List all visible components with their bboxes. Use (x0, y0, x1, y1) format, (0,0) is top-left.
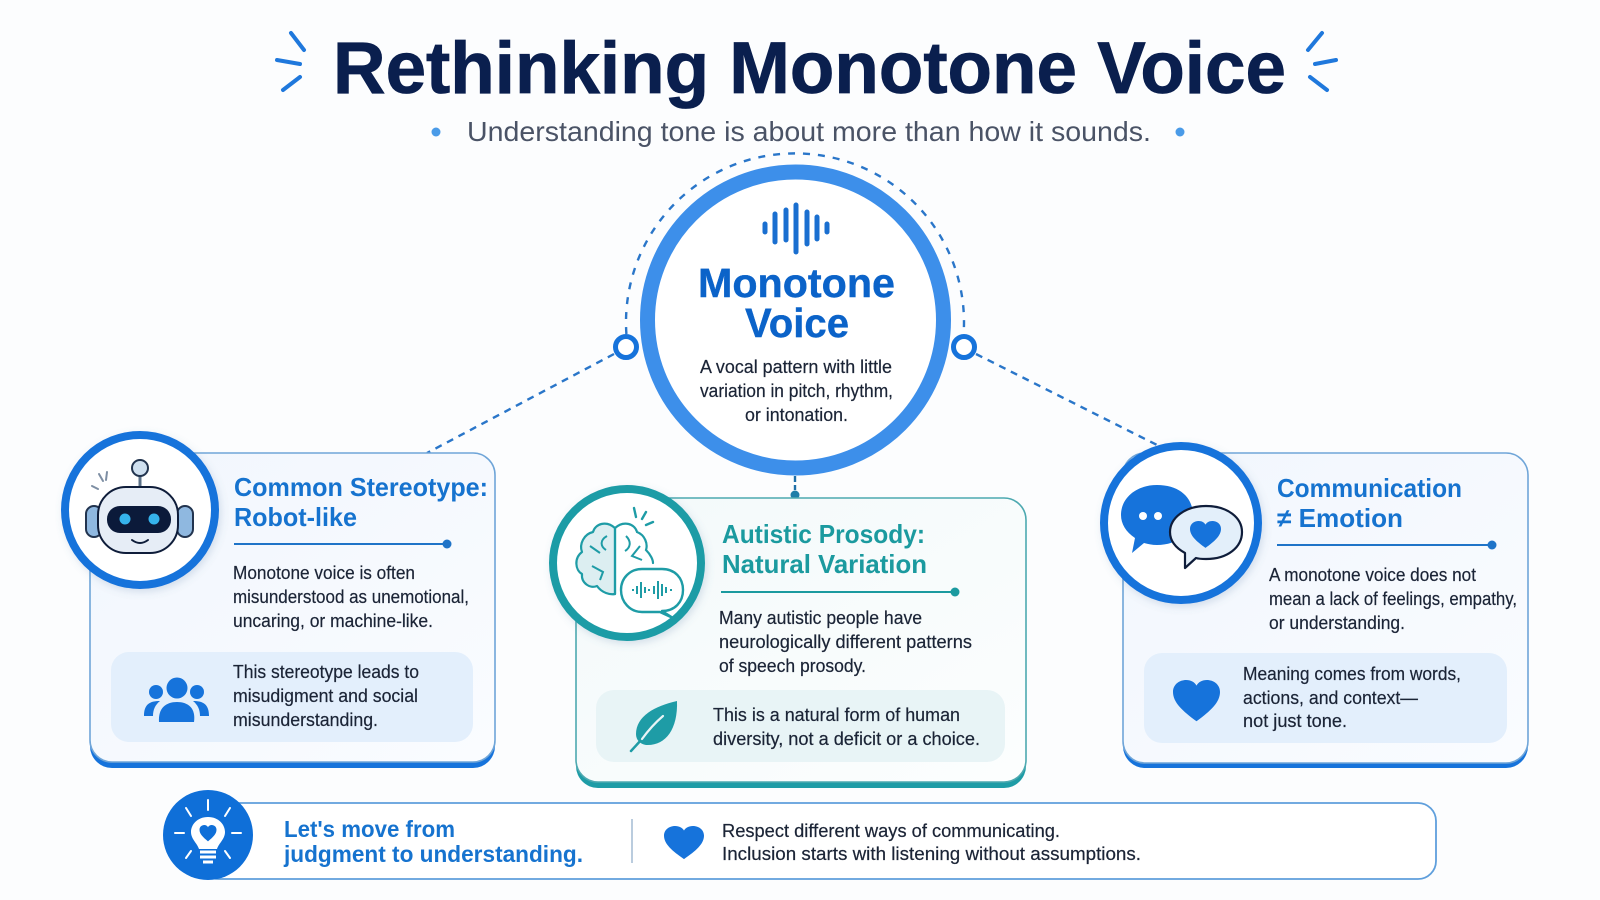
divider (721, 588, 960, 596)
icon: light bulb with heart (163, 790, 253, 880)
heading: common stereotype: Robot-like (234, 502, 357, 532)
icon: sound wave (765, 205, 827, 252)
body text: of speech prosody. (719, 656, 866, 676)
body text (1269, 565, 1517, 633)
banner text: Respect different ways of communicating. (722, 821, 1060, 841)
icon: brain and speech bubble (553, 489, 701, 637)
central heading: Voice (745, 300, 849, 346)
panel: autistic prosody (553, 489, 1026, 788)
icon: leaf (631, 701, 677, 751)
central heading: Monotone (698, 260, 895, 306)
central description: or intonation. (745, 405, 848, 425)
callout: misunderstanding. (233, 710, 378, 730)
heading: communication not emotion (1277, 473, 1462, 533)
banner text (722, 821, 1141, 864)
callout (111, 652, 473, 742)
icon: heart (664, 826, 704, 859)
callout: actions, and context— (1243, 688, 1418, 708)
banner heading: judgment to understanding. (283, 841, 583, 867)
heading: autistic prosody: Autistic Prosody: (722, 519, 925, 549)
icon: right title rays (1308, 33, 1336, 90)
divider (234, 540, 452, 548)
central description: variation in pitch, rhythm, (700, 381, 893, 401)
body text: Monotone voice is often (233, 563, 415, 583)
banner heading (283, 816, 583, 867)
banner text: Inclusion starts with listening without assumptions. (722, 844, 1141, 864)
connector: right dashed line (976, 354, 1157, 445)
central heading (698, 260, 895, 346)
body text: A monotone voice does not (1269, 565, 1476, 585)
icon: people (144, 678, 209, 722)
icon: left title rays (277, 33, 304, 90)
body text: neurologically different patterns (719, 632, 972, 652)
body text: or understanding. (1269, 613, 1405, 633)
heading: common stereotype: Common Stereotype: (234, 472, 488, 502)
icon: robot (65, 435, 215, 585)
central circle (648, 172, 944, 468)
central description (700, 357, 893, 425)
banner heading: Let's move from (284, 816, 455, 842)
heading: autistic prosody: Natural Variation (722, 549, 927, 579)
icon: speech bubbles with heart (1104, 446, 1258, 600)
body text: uncaring, or machine-like. (233, 611, 433, 631)
icon: heart (1173, 680, 1220, 721)
callout (596, 690, 1005, 762)
connector: centre stub (790, 476, 800, 500)
connector: dashed arc around the central circle (626, 153, 964, 334)
central description: A vocal pattern with little (700, 357, 892, 377)
node: left ring (616, 336, 636, 358)
callout: diversity, not a deficit or a choice. (713, 729, 980, 749)
callout: not just tone. (1243, 711, 1347, 731)
divider (1277, 540, 1496, 550)
callout: misudigment and social (233, 686, 418, 706)
callout: Meaning comes from words, (1243, 664, 1461, 684)
body text: mean a lack of feelings, empathy, (1269, 589, 1517, 609)
heading: communication not emotion: ≠ Emotion (1277, 503, 1403, 533)
body text (719, 608, 972, 676)
node: right ring (954, 336, 974, 358)
subtitle: Understanding tone is about more than how it sounds. (467, 116, 1151, 147)
panel: communication not emotion (1104, 446, 1528, 768)
panel: bottom banner (163, 790, 1436, 880)
body text: Many autistic people have (719, 608, 922, 628)
heading: communication not emotion: Communication (1277, 473, 1462, 503)
body text (233, 563, 469, 631)
title: Rethinking Monotone Voice (333, 28, 1286, 109)
panel: common stereotype (65, 435, 495, 768)
callout: This stereotype leads to (233, 662, 419, 682)
callout (1144, 653, 1507, 743)
connector: left dashed line (427, 354, 614, 453)
heading: common stereotype (234, 472, 488, 532)
heading: autistic prosody (722, 519, 927, 579)
body text: misunderstood as unemotional, (233, 587, 469, 607)
callout: This is a natural form of human (713, 705, 960, 725)
